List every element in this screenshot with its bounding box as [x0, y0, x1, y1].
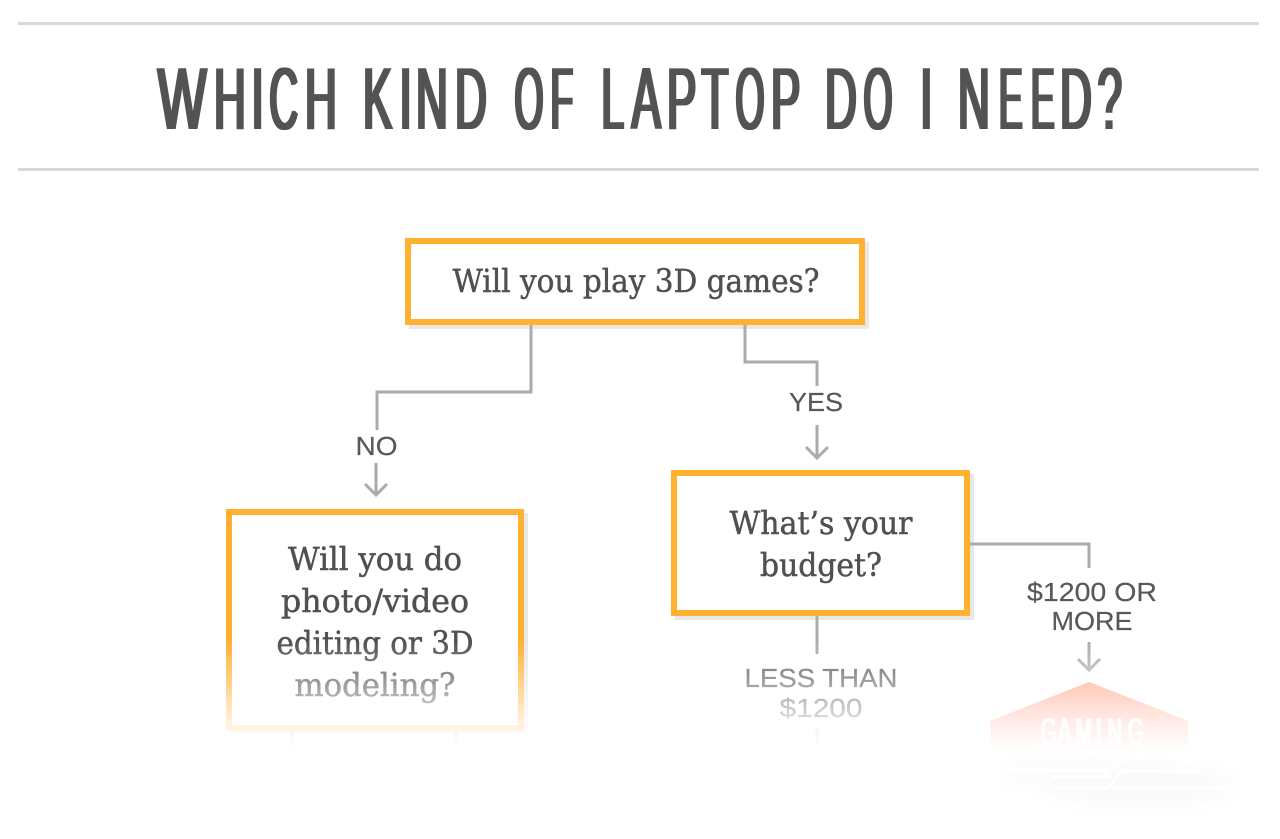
title: W	[158, 51, 207, 148]
arrow: budget high	[1078, 642, 1100, 670]
title: O	[736, 51, 764, 149]
result label: gaming: GAMING	[1041, 710, 1143, 754]
title: O	[864, 51, 892, 149]
title: P	[771, 49, 800, 148]
label: yes: YES	[789, 387, 843, 417]
laptop illustration remnant	[995, 755, 1247, 805]
title: F	[550, 51, 573, 149]
result shape: gaming	[990, 682, 1188, 770]
label: no: NO	[356, 431, 398, 461]
title: D	[1060, 49, 1092, 148]
bottom rule	[18, 168, 1259, 171]
title: L	[602, 49, 624, 148]
top rule	[18, 22, 1259, 25]
label: $1200 or more: $1200 OR	[1027, 577, 1157, 607]
title: ?	[1098, 49, 1122, 148]
question box: budget	[674, 473, 974, 620]
question box: editing: editing or 3D	[276, 624, 474, 662]
connectors: below editing question	[292, 731, 456, 752]
connector: no branch	[356, 325, 531, 461]
title: H	[305, 49, 337, 148]
title: N	[958, 49, 990, 148]
title	[158, 49, 1122, 149]
label: less than $1200: $1200	[780, 693, 862, 723]
title: E	[999, 50, 1022, 149]
arrow: no	[365, 463, 387, 495]
label: $1200 or more: MORE	[1052, 606, 1132, 636]
connector: budget low	[816, 616, 818, 750]
title: D	[825, 49, 857, 148]
question box: editing: Will you do	[288, 540, 462, 578]
question box: budget: What’s your	[730, 504, 913, 542]
title: APT	[632, 49, 728, 148]
label: less than $1200: LESS THAN	[744, 663, 898, 693]
question box: budget: budget?	[760, 546, 882, 584]
arrow: yes	[806, 425, 828, 458]
title: I	[920, 49, 933, 148]
title: O	[515, 51, 543, 149]
question box: editing	[229, 512, 528, 735]
title: C	[269, 50, 298, 148]
question box: 3D games: Will you play 3D games?	[452, 262, 820, 300]
question box: editing: photo/video	[281, 582, 469, 620]
title: E	[1031, 50, 1054, 149]
fade overlay	[0, 640, 1280, 750]
question box: editing: modeling?	[294, 666, 456, 704]
title: HI	[214, 49, 264, 148]
connector: budget high	[970, 544, 1157, 636]
connector: yes branch	[745, 325, 843, 417]
title: KIND	[363, 49, 487, 148]
question box: 3D games	[408, 241, 869, 329]
